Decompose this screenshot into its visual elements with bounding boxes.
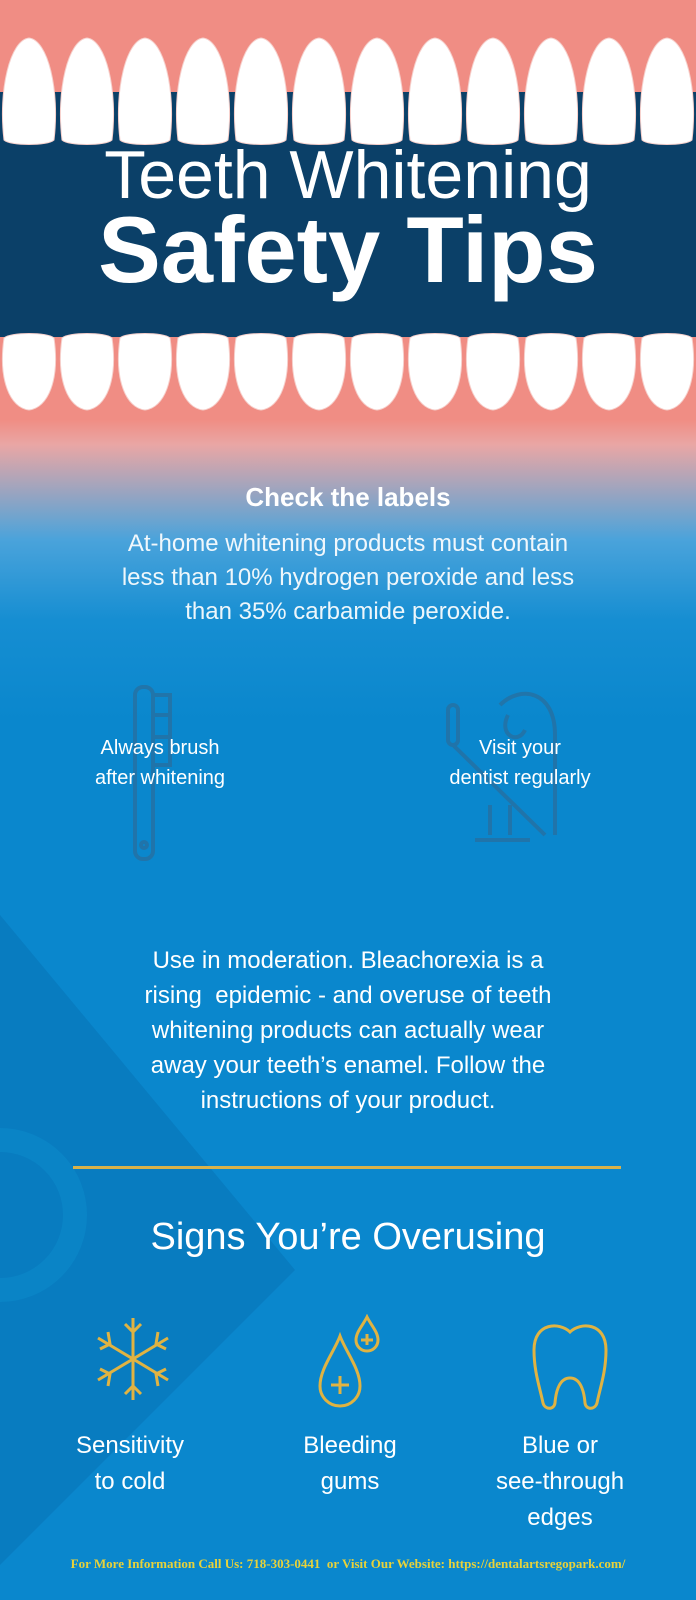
label: bleeding gums: gums xyxy=(321,1468,379,1495)
heading: check the labels: Check the labels xyxy=(245,482,451,512)
text: labels info xyxy=(122,530,574,625)
title: Safety Tips xyxy=(98,197,598,302)
text: moderation: whitening products can actually wear xyxy=(152,1017,544,1044)
text: moderation: away your teeth’s enamel. Follow the xyxy=(151,1052,545,1079)
label: bleeding gums xyxy=(303,1432,397,1495)
text: moderation: Use in moderation. Bleachorexia is a xyxy=(153,947,543,974)
heading: signs you're overusing: Signs You’re Overusing xyxy=(150,1216,546,1258)
label: sensitivity to cold: Sensitivity xyxy=(76,1432,184,1459)
text: always brush: Always brush xyxy=(101,737,219,759)
text: visit dentist: dentist regularly xyxy=(449,767,591,789)
text: always brush: after whitening xyxy=(95,767,225,789)
text: moderation: rising epidemic - and overuse of teeth xyxy=(145,982,551,1009)
icon: blood drops xyxy=(318,1314,380,1408)
text: always brush xyxy=(95,737,225,789)
label: bleeding gums: Bleeding xyxy=(303,1432,397,1459)
label: blue edges xyxy=(496,1432,624,1531)
text: visit dentist xyxy=(449,737,591,789)
footer: For More Information Call Us: 718-303-0441 or Visit Our Website: https://dentalartsregopark.com/ xyxy=(71,1556,625,1571)
label: blue edges: edges xyxy=(527,1504,593,1531)
icon: tooth xyxy=(532,1324,608,1410)
icon: dental chair xyxy=(446,692,557,842)
header: teeth and title panel xyxy=(0,38,696,410)
label: sensitivity to cold xyxy=(76,1432,184,1495)
text: labels info: less than 10% hydrogen peroxide and less xyxy=(122,564,574,591)
label: blue edges: see-through xyxy=(496,1468,624,1495)
title xyxy=(98,137,598,302)
text: moderation: instructions of your product. xyxy=(201,1087,495,1114)
label: blue edges: Blue or xyxy=(522,1432,598,1459)
text: visit dentist: Visit your xyxy=(479,737,561,759)
text: moderation xyxy=(145,947,551,1114)
divider line xyxy=(73,1166,621,1169)
icon: toothbrush xyxy=(133,685,172,861)
title: Teeth Whitening xyxy=(104,137,592,213)
text: labels info: than 35% carbamide peroxide. xyxy=(185,598,511,625)
icon: snowflake xyxy=(97,1318,169,1400)
text: labels info: At-home whitening products must contain xyxy=(128,530,568,557)
label: sensitivity to cold: to cold xyxy=(95,1468,165,1495)
